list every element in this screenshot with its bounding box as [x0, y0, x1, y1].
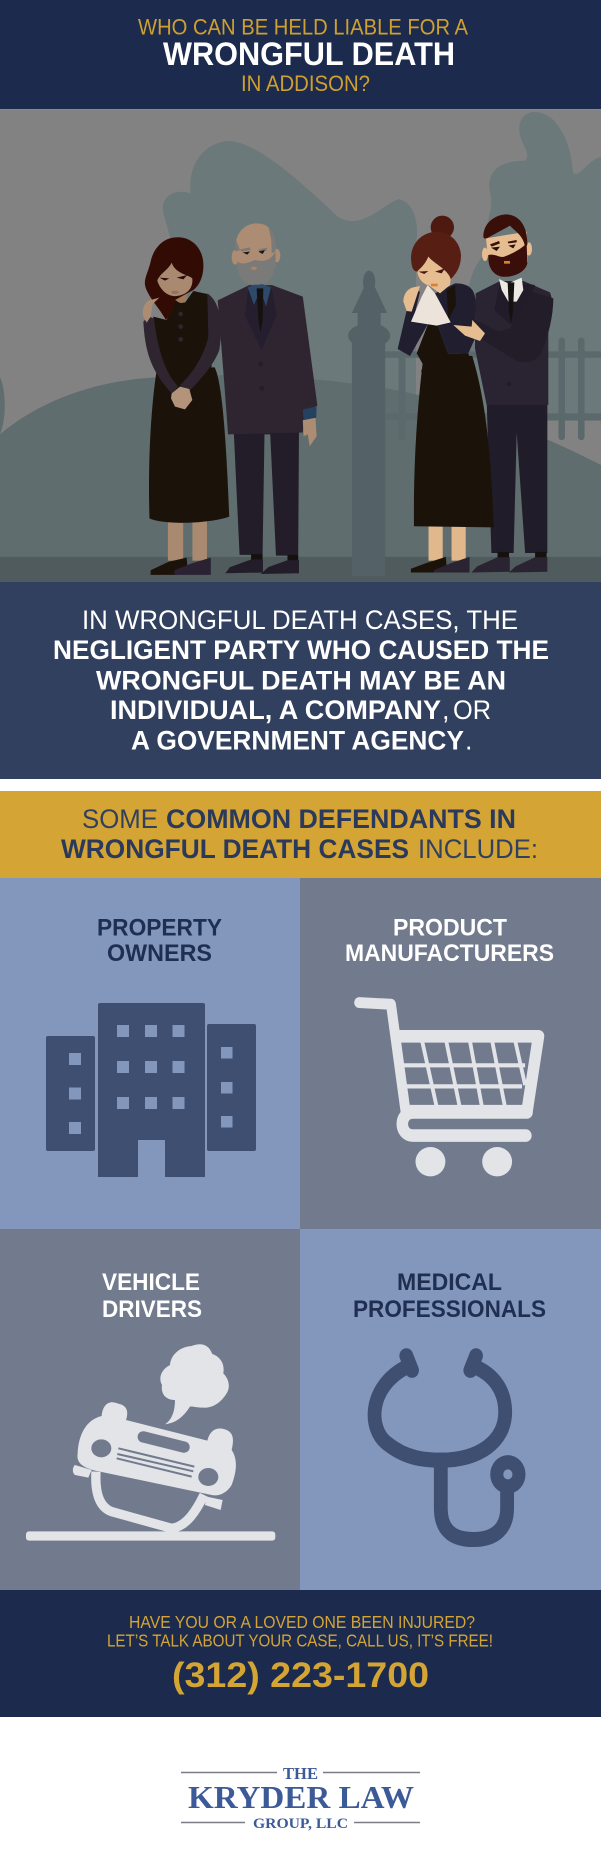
statement panel: INDIVIDUAL, A COMPANY: [110, 695, 441, 725]
title panel: IN ADDISON?: [241, 71, 370, 96]
title panel: [0, 0, 601, 109]
icon: office buildings: [46, 1003, 256, 1177]
statement panel: OR: [453, 695, 491, 725]
gold heading band: SOME: [82, 804, 158, 834]
logo: KRYDER LAW: [188, 1779, 414, 1815]
gold heading band: COMMON DEFENDANTS IN: [166, 804, 516, 834]
statement panel: ,: [442, 695, 450, 725]
statement panel: WRONGFUL DEATH MAY BE AN: [96, 666, 506, 696]
woman: skirt and legs: [149, 367, 229, 575]
statement panel: A GOVERNMENT AGENCY: [131, 726, 464, 756]
panel: product manufacturers: [300, 878, 601, 1229]
statement panel: NEGLIGENT PARTY WHO CAUSED THE: [53, 635, 549, 665]
panel: medical professionals: [300, 1229, 601, 1590]
panel: vehicle drivers: VEHICLE: [102, 1269, 200, 1296]
statement panel: IN WRONGFUL DEATH CASES, THE: [82, 605, 518, 635]
panel: property owners: PROPERTY: [97, 914, 222, 942]
panel: property owners: OWNERS: [107, 940, 212, 967]
icon: stethoscope: [375, 1356, 526, 1540]
panel: property owners: [0, 878, 300, 1229]
panel: product manufacturers: MANUFACTURERS: [345, 940, 554, 967]
logo: [181, 1764, 420, 1832]
panel: vehicle drivers: DRIVERS: [102, 1296, 202, 1323]
title panel: WRONGFUL DEATH: [163, 36, 455, 72]
crying woman: skirt and legs: [411, 356, 494, 573]
logo: THE: [283, 1764, 318, 1783]
older man: lower body: [218, 285, 317, 574]
call to action panel: (312) 223-1700: [172, 1656, 429, 1695]
gold heading band: WRONGFUL DEATH CASES: [61, 834, 409, 864]
icon: overturned car with smoke: [26, 1344, 275, 1541]
title panel: WHO CAN BE HELD LIABLE FOR A: [138, 14, 468, 40]
figures: younger couple: [398, 214, 553, 573]
bearded man: head and arm: [453, 214, 553, 362]
call to action panel: LET’S TALK ABOUT YOUR CASE, CALL US, IT’S FREE!: [107, 1630, 493, 1650]
gold heading band: [0, 791, 601, 878]
woman: head and torso: [143, 237, 221, 409]
panel: vehicle drivers: [0, 1229, 300, 1590]
call to action panel: [0, 1590, 601, 1717]
crying woman: head, jacket and handkerchief: [398, 216, 476, 372]
logo: GROUP, LLC: [253, 1816, 348, 1832]
panel: product manufacturers: PRODUCT: [393, 914, 507, 942]
bearded man: jacket: [475, 281, 553, 405]
call to action panel: HAVE YOU OR A LOVED ONE BEEN INJURED?: [129, 1612, 475, 1632]
icon: shopping cart: [359, 1003, 539, 1176]
panel: medical professionals: PROFESSIONALS: [353, 1296, 546, 1323]
statement panel: .: [465, 726, 473, 756]
older man: head and collar: [232, 223, 280, 391]
illustration: cemetery background: [0, 109, 601, 584]
statement panel: [0, 582, 601, 779]
bearded man: lower body and jacket: [471, 403, 547, 573]
panel: medical professionals: MEDICAL: [397, 1269, 502, 1296]
gold heading band: INCLUDE:: [418, 834, 538, 864]
figures: older man and woman: [143, 223, 317, 575]
